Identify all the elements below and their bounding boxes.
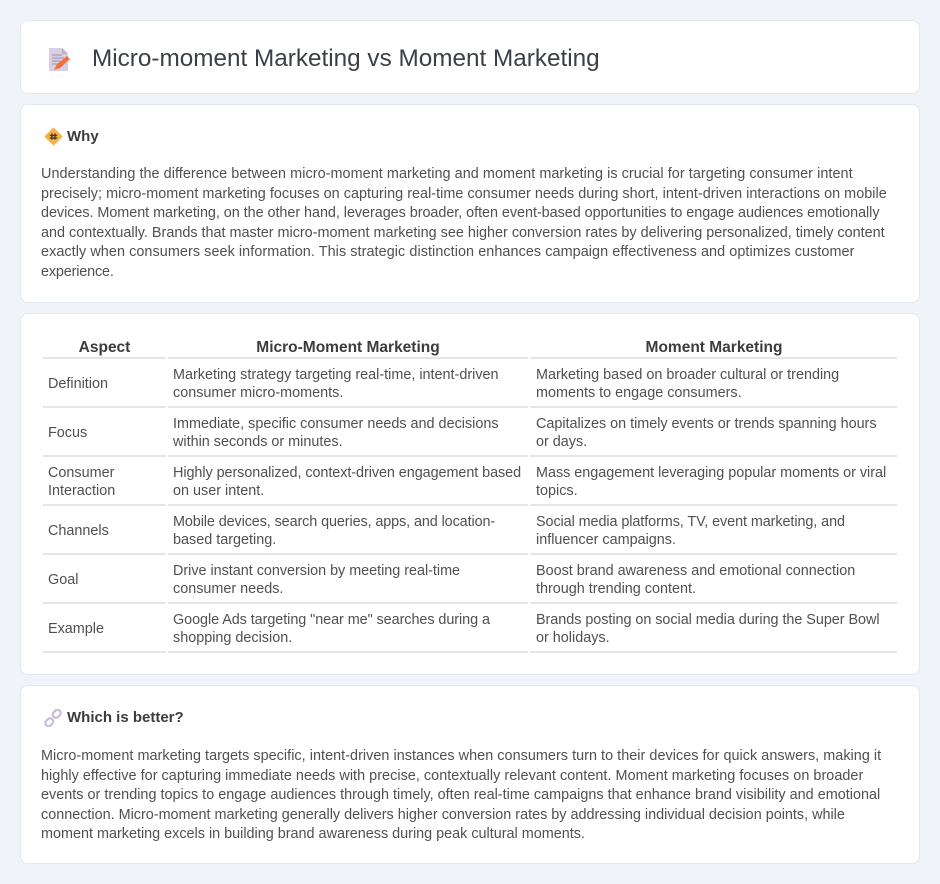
icon: link <box>44 709 62 727</box>
icon: diamond sign <box>44 128 62 146</box>
row: example: or holidays. <box>536 630 610 646</box>
row: focus <box>48 416 877 450</box>
row: example <box>48 612 880 646</box>
text: why body: exactly when consumers seek information. This strategic distinction enhances campaign effectiveness and optimizes customer <box>41 244 854 260</box>
row: focus: Focus <box>48 425 87 441</box>
row: definition: Marketing based on broader cultural or trending <box>536 367 839 383</box>
heading: why: Why <box>67 128 99 145</box>
text: why body <box>41 166 887 280</box>
text: why body: and contextually. Brands that master micro-moment marketing see higher conversion rates by delivering personalized, timely content <box>41 224 885 240</box>
row: definition: Definition <box>48 376 108 392</box>
row: example: Example <box>48 621 104 637</box>
row: example: shopping decision. <box>173 630 292 646</box>
row: channels: Channels <box>48 523 109 539</box>
table header <box>79 339 782 356</box>
text: why body: Understanding the difference between micro-moment marketing and moment marketing is crucial for targeting consumer intent <box>41 166 853 182</box>
row: example: Google Ads targeting "near me" searches during a <box>173 612 490 628</box>
panel: title header <box>20 20 920 94</box>
row: channels: Social media platforms, TV, event marketing, and <box>536 514 845 530</box>
row: example: Brands posting on social media during the Super Bowl <box>536 612 880 628</box>
row: consumer interaction: on user intent. <box>173 483 264 499</box>
panel: why <box>20 104 920 303</box>
text: which is better body <box>41 748 882 842</box>
text: why body: precisely; micro-moment marketing focuses on capturing real-time consumer needs during short, intent-driven interactions on mobile <box>41 186 887 202</box>
row: consumer interaction <box>48 465 886 499</box>
row: consumer interaction: Consumer <box>48 465 114 481</box>
row: definition: moments to engage consumers. <box>536 385 742 401</box>
text: why body: devices. Moment marketing, on the other hand, leverages broader, often event-based opportunities to engage audiences emotionally <box>41 205 879 221</box>
row: goal: consumer needs. <box>173 581 283 597</box>
row: goal <box>48 563 855 597</box>
row: focus: or days. <box>536 434 587 450</box>
heading: which is better: Which is better? <box>67 709 184 726</box>
row: consumer interaction: topics. <box>536 483 578 499</box>
row: consumer interaction: Highly personalized, context-driven engagement based <box>173 465 521 481</box>
row: goal: Boost brand awareness and emotional connection <box>536 563 855 579</box>
text: which is better body: moment marketing excels in building brand awareness during peak cultural moments. <box>41 826 585 842</box>
table header: Moment Marketing <box>646 339 782 356</box>
row: definition: Marketing strategy targeting real-time, intent-driven <box>173 367 499 383</box>
text: which is better body: highly effective for capturing immediate needs with precise, contextually relevant content. Moment marketing focuses on broader <box>41 768 863 784</box>
row: focus: Immediate, specific consumer needs and decisions <box>173 416 499 432</box>
text: which is better body: events or trending topics to engage audiences through timely, often real-time campaigns that enhance brand visibility and emotional <box>41 787 880 803</box>
row: channels: based targeting. <box>173 532 276 548</box>
row: focus: within seconds or minutes. <box>173 434 343 450</box>
row: definition <box>48 367 839 401</box>
row: goal: Goal <box>48 572 78 588</box>
text: why body: experience. <box>41 264 114 280</box>
row: channels: influencer campaigns. <box>536 532 676 548</box>
title: Micro-moment Marketing vs Moment Marketing <box>92 45 600 72</box>
table header: Aspect <box>79 339 130 356</box>
panel: comparison table <box>20 313 920 675</box>
row: goal: through trending content. <box>536 581 696 597</box>
text: which is better body: connection. Micro-moment marketing generally delivers higher conversion rates by addressing individual decision points, while <box>41 806 845 822</box>
row: focus: Capitalizes on timely events or trends spanning hours <box>536 416 877 432</box>
row: goal: Drive instant conversion by meeting real-time <box>173 563 460 579</box>
row: definition: consumer micro-moments. <box>173 385 343 401</box>
row: consumer interaction: Interaction <box>48 483 115 499</box>
table header: Micro-Moment Marketing <box>256 339 440 356</box>
icon: memo with pencil <box>49 48 70 71</box>
row: channels: Mobile devices, search queries, apps, and location- <box>173 514 495 530</box>
text: which is better body: Micro-moment marketing targets specific, intent-driven instances when consumers turn to their devices for quick answers, making it <box>41 748 881 764</box>
panel: which is better <box>20 685 920 864</box>
row: consumer interaction: Mass engagement leveraging popular moments or viral <box>536 465 886 481</box>
row: channels <box>48 514 845 548</box>
